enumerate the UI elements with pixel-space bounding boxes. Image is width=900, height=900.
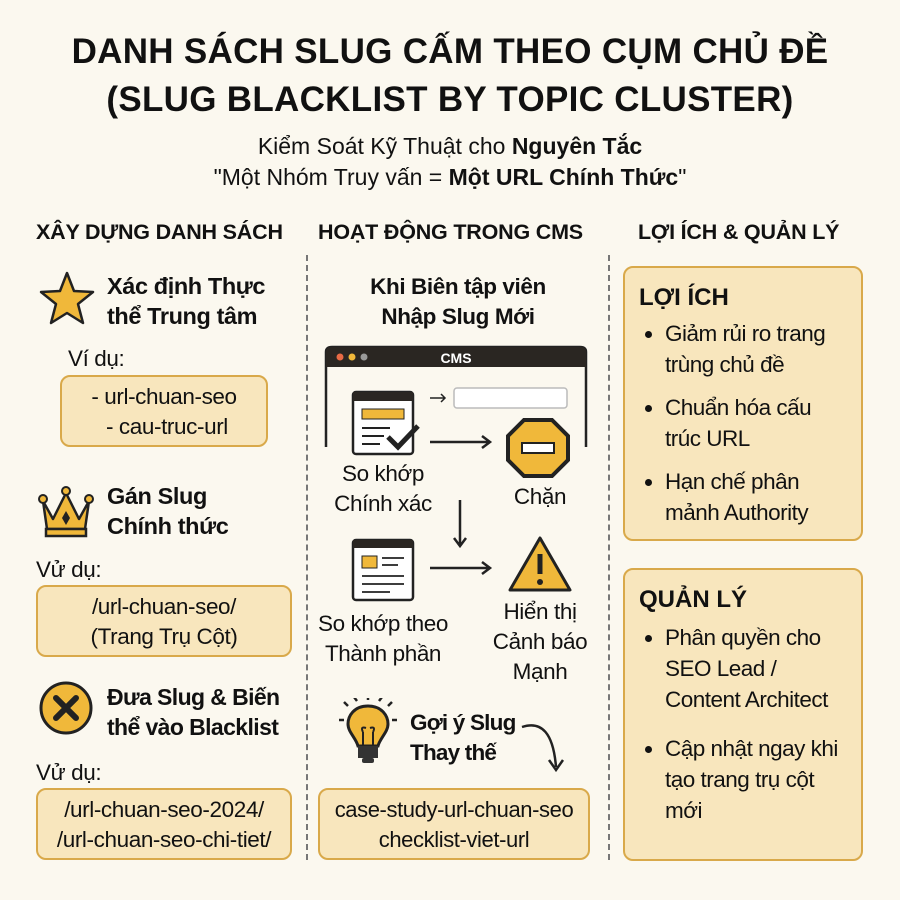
text: exact match: So khớp <box>342 461 424 486</box>
box: suggestions: checklist-viet-url <box>379 827 529 852</box>
text: block: Chặn <box>514 484 566 509</box>
text: warning <box>493 599 587 684</box>
text: partial match: So khớp theo <box>318 611 448 636</box>
heading: suggest: Gợi ý Slug <box>410 710 516 735</box>
list: benefits: mảnh Authority <box>665 500 808 525</box>
subtitle: "Một Nhóm Truy vấn = Một URL Chính Thức" <box>214 164 686 190</box>
title: (SLUG BLACKLIST BY TOPIC CLUSTER) <box>106 80 794 119</box>
heading: step2: Gán Slug <box>107 483 207 509</box>
box: example 2: (Trang Trụ Cột) <box>91 624 237 649</box>
text: warning: Mạnh <box>513 659 567 684</box>
heading: step3: Đưa Slug & Biến <box>107 684 280 710</box>
box: suggestions <box>318 788 590 860</box>
heading: step3: thể vào Blacklist <box>107 714 278 740</box>
list: benefits: Chuẩn hóa cấu <box>665 395 811 420</box>
heading: suggest <box>410 710 516 765</box>
box: example 1: - url-chuan-seo <box>91 384 237 409</box>
heading: step1: Xác định Thực <box>107 273 265 299</box>
text: partial match: Thành phần <box>325 641 441 666</box>
list: benefits: Giảm rủi ro trang <box>665 321 825 346</box>
panel: cms <box>318 274 590 860</box>
arrow: curved <box>522 724 564 772</box>
subtitle <box>214 133 686 190</box>
list: management: Cập nhật ngay khi <box>665 736 838 761</box>
heading: step2: Chính thức <box>107 513 228 539</box>
panel: management <box>623 568 863 861</box>
box: example 3: /url-chuan-seo-chi-tiet/ <box>57 827 271 852</box>
list: benefits <box>645 321 825 525</box>
icon: star <box>40 272 94 324</box>
panel: build list <box>36 272 292 860</box>
heading: cms: Khi Biên tập viên <box>370 274 546 299</box>
diagram: cms window: CMS <box>440 350 472 366</box>
heading: benefits: LỢI ÍCH <box>639 284 729 311</box>
text: example label: Ví dụ: <box>68 346 124 371</box>
title: DANH SÁCH SLUG CẤM THEO CỤM CHỦ ĐỀ <box>72 32 828 71</box>
list: management: Phân quyền cho <box>665 625 821 650</box>
list: management: SEO Lead / <box>665 656 776 681</box>
icon: crown <box>38 486 94 538</box>
heading: suggest: Thay thế <box>410 740 496 765</box>
list: benefits: trúc URL <box>665 426 750 451</box>
panel: benefits <box>623 266 863 541</box>
text: warning: Cảnh báo <box>493 629 587 654</box>
text: partial match <box>318 611 448 666</box>
diagram: cms window <box>324 346 588 602</box>
icon: bulb <box>339 698 397 763</box>
subtitle: Kiểm Soát Kỹ Thuật cho Nguyên Tắc <box>258 133 642 159</box>
heading: cms: Nhập Slug Mới <box>381 304 535 329</box>
heading: step2 <box>107 483 228 539</box>
list: management: tạo trang trụ cột <box>665 767 814 792</box>
heading: step1: thể Trung tâm <box>107 303 257 329</box>
list: management: mới <box>665 798 702 823</box>
text: example label 3: Vử dụ: <box>36 760 101 785</box>
text: example label 2: Vử dụ: <box>36 557 101 582</box>
title <box>72 31 828 119</box>
column header: cms: HOẠT ĐỘNG TRONG CMS <box>318 220 583 244</box>
column header: benefits: LỢI ÍCH & QUẢN LÝ <box>638 220 839 244</box>
heading: cms <box>370 274 546 329</box>
box: example 1: - cau-truc-url <box>106 414 228 439</box>
list: management: Content Architect <box>665 687 828 712</box>
text: exact match <box>334 461 432 516</box>
box: example 2 <box>36 585 292 657</box>
box: example 3 <box>36 788 292 860</box>
list: benefits: Hạn chế phân <box>665 469 799 494</box>
heading: management: QUẢN LÝ <box>639 586 747 613</box>
icon: x circle <box>40 682 92 734</box>
column header: build: XÂY DỰNG DANH SÁCH <box>36 220 283 244</box>
list: management <box>645 625 838 823</box>
box: suggestions: case-study-url-chuan-seo <box>335 797 573 822</box>
text: warning: Hiển thị <box>503 599 577 624</box>
box: example 3: /url-chuan-seo-2024/ <box>64 797 264 822</box>
text: exact match: Chính xác <box>334 491 432 516</box>
heading: step3 <box>107 684 280 740</box>
list: benefits: trùng chủ đề <box>665 352 784 377</box>
box: example 2: /url-chuan-seo/ <box>92 594 236 619</box>
box: example 1 <box>60 375 268 447</box>
heading: step1 <box>107 273 265 329</box>
